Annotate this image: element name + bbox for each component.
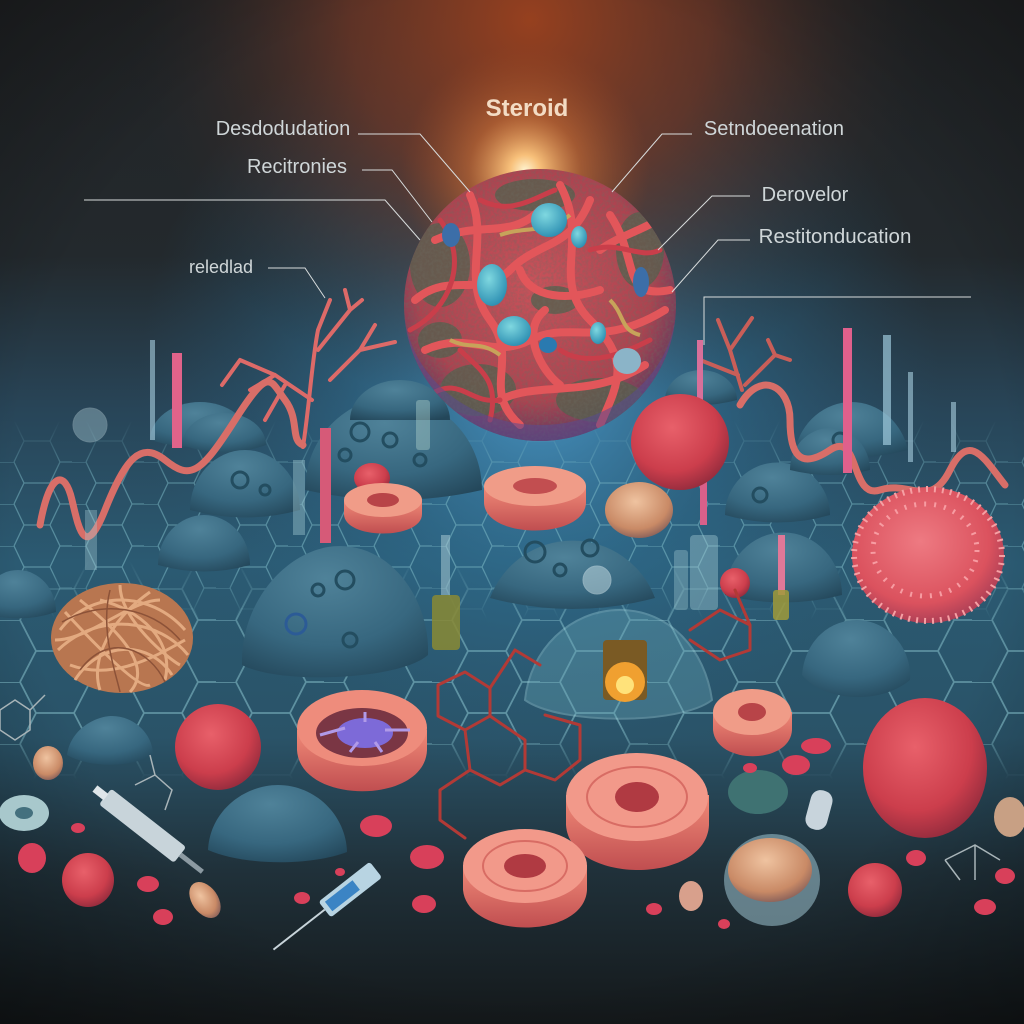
- sphere speckle texture: [400, 165, 680, 445]
- label: second right: Derovelor: [762, 184, 849, 206]
- yarn-like fibre ball: [51, 583, 193, 693]
- fuzzy pink cell: [852, 487, 1004, 623]
- label: lower left: reledlad: [189, 257, 253, 277]
- scattered red blood cell pills: [18, 738, 1015, 929]
- purple spiky cell: [320, 712, 410, 752]
- main steroid sphere: [400, 165, 680, 445]
- label: second left: Recitronies: [247, 156, 347, 178]
- left branching vessel: [222, 290, 395, 447]
- label: upper left: Desdodudation: [216, 118, 350, 140]
- hexagonal cell network: [0, 420, 1024, 780]
- label: upper right: Setndoeenation: [704, 118, 844, 140]
- red steroid molecule structures: [438, 590, 750, 838]
- small white-blue ring and capsule: [0, 770, 1024, 837]
- glass dome with glowing vial: [525, 610, 712, 719]
- sphere dark tissue patches: [410, 179, 664, 422]
- sphere vessel network: [415, 185, 670, 425]
- grey molecule sketches: [0, 695, 1000, 880]
- donut: right: [713, 689, 792, 756]
- donut: back left: [344, 483, 422, 534]
- syringe right: [267, 862, 382, 958]
- glass vials: [416, 400, 789, 650]
- title: Steroid: [486, 95, 568, 122]
- front blue cell domes: [67, 546, 910, 862]
- syringe left: [89, 781, 208, 880]
- right wavy vessel: [740, 385, 1005, 492]
- donut: large front left: [463, 829, 587, 928]
- donut: large front right: [566, 753, 709, 870]
- donut: back centre: [484, 466, 586, 530]
- donut: with purple cell: [297, 690, 427, 791]
- glow above the sphere: [400, 45, 650, 295]
- sphere cyan cells: [442, 203, 649, 374]
- leader lines: [84, 134, 971, 345]
- glass columns and striped rods: [73, 328, 956, 595]
- label: third right: Restitonducation: [759, 225, 911, 248]
- dome organelle rings: [232, 423, 847, 647]
- back row of blue cell domes: [0, 370, 908, 618]
- tan and glassy cells: [33, 482, 820, 926]
- red spheres: [62, 394, 987, 917]
- right branching vessel: [700, 318, 790, 390]
- left wavy vessel: [40, 382, 303, 537]
